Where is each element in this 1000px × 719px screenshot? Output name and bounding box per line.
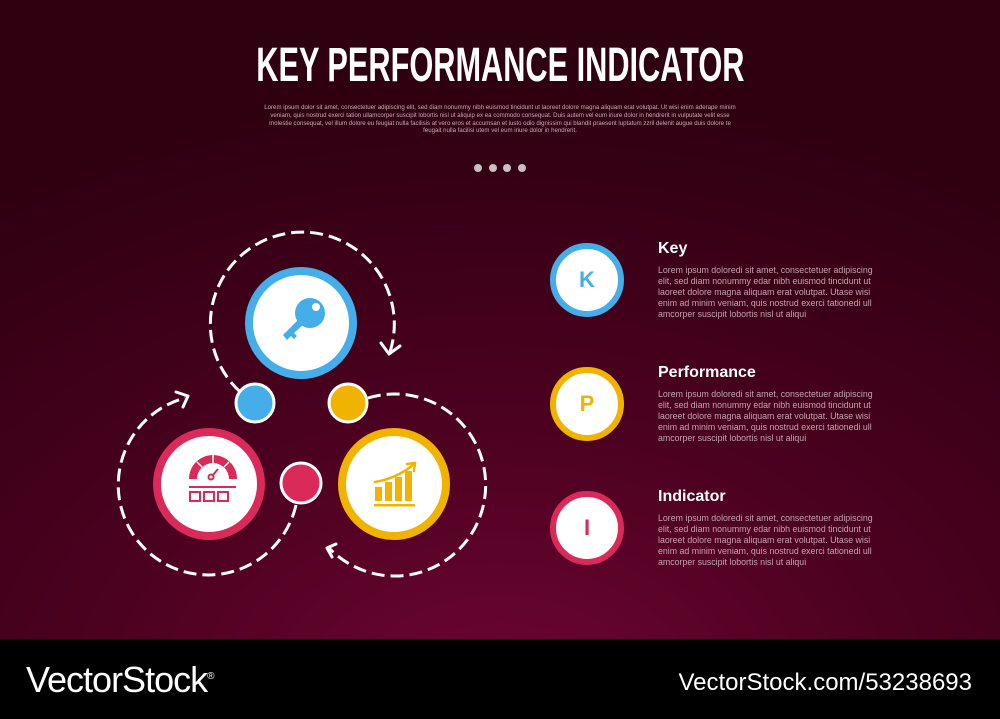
heading Key: Key [658,240,687,257]
performance circle with chart icon [342,432,446,536]
heading Indicator: Indicator [658,488,726,505]
footer bar [0,639,1000,719]
item: Performance [550,364,873,443]
key circle with key icon [249,271,353,375]
arrow: key arc [210,232,394,403]
indicator circle with gauge icon [157,432,261,536]
badge P [550,367,624,441]
pagination dots [474,164,526,172]
text Performance: Lorem ipsum doloredi sit amet, consectetuer adipiscing elit, sed diam nonummy edar nibh euismod tincidunt ut laoreet dolore magna aliquam erat volutpat. Utase wisi enim ad minim veniam, quis nostrud exerci tationedi ull amcorper suscipit lobortis nisl ut aliqui [658,389,873,443]
title: KEY PERFORMANCE INDICATOR [256,39,744,92]
badge P: P [580,391,594,416]
text Indicator: Lorem ipsum doloredi sit amet, consectetuer adipiscing elit, sed diam nonummy edar nibh euismod tincidunt ut laoreet dolore magna aliquam erat volutpat. Utase wisi enim ad minim veniam, quis nostrud exerci tationedi ull amcorper suscipit lobortis nisl ut aliqui [658,513,873,567]
connector dots [236,384,367,503]
intro paragraph: Lorem ipsum dolor sit amet, consectetuer adipiscing elit, sed diam nonummy nibh euismod tincidunt ut laoreet dolore magna aliquam erat volutpat. Ut wisi enim aderape minim veniam, quis nostrud exerci tation ullamcorper suscipit lobortis nisl ut aliquip ex ea commodo consequat. Duis autem vel eum iriure dolor in hendrerit in vulputate velit esse molestie consequat, vel illum dolore eu feugiat nulla facilisis at vero eros et accumsan et iusto odio dignissim qui blandit praesent luptatum zzril delenit augue duis dolore te feugait nulla facilisi utem vel eum iriure dolor in hendrerit. [264,104,736,134]
item: Key [550,240,873,319]
badge K [550,243,624,317]
text Key: Lorem ipsum doloredi sit amet, consectetuer adipiscing elit, sed diam nonummy edar nibh euismod tincidunt ut laoreet dolore magna aliquam erat volutpat. Utase wisi enim ad minim veniam, quis nostrud exerci tationedi ull amcorper suscipit lobortis nisl ut aliqui [658,265,873,319]
logo: VectorStock® [26,659,213,700]
badge K: K [579,267,595,292]
arrow: indicator arc [118,398,296,575]
heading Performance: Performance [658,364,756,381]
badge I [550,491,624,565]
arrow: performance arc [329,394,486,576]
arrowheads [176,343,400,557]
item: Indicator [550,488,873,567]
badge I: I [584,515,590,540]
url: VectorStock.com/53238693 [678,669,972,696]
